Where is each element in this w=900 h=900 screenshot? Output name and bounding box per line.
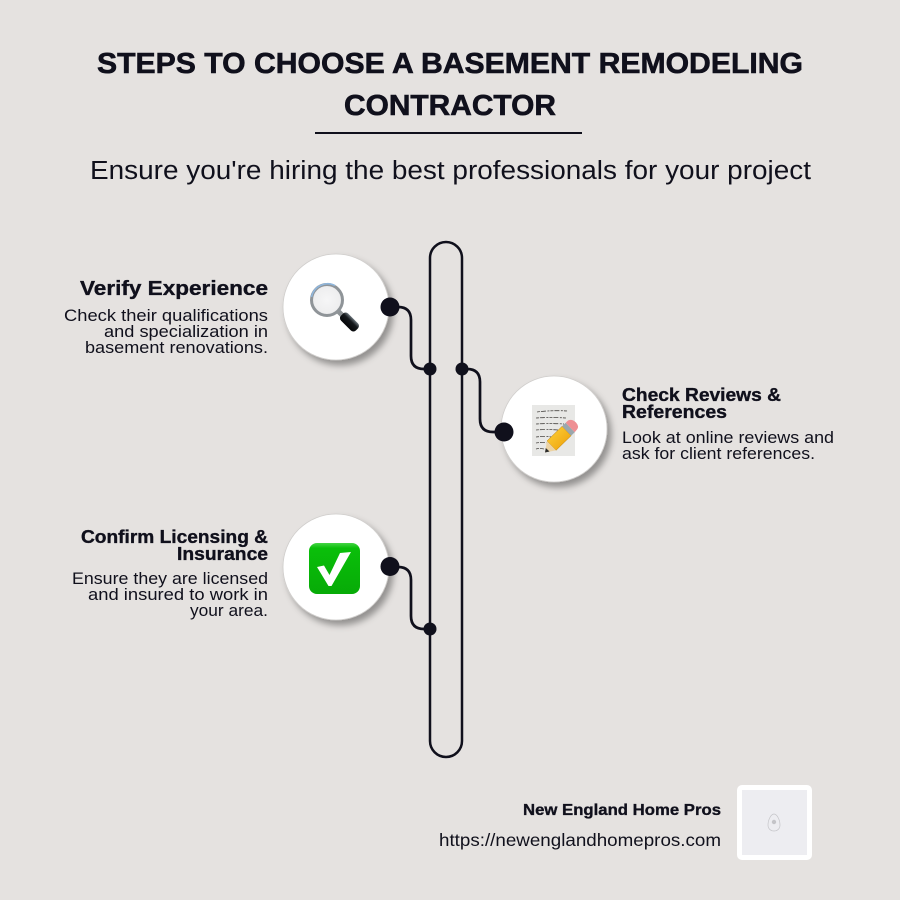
title: STEPS TO CHOOSE A BASEMENT REMODELING [97, 48, 803, 80]
connector 2 [456, 362, 514, 442]
step 1 text: and specialization in [104, 323, 268, 341]
title: CONTRACTOR [344, 90, 556, 122]
connector 1 [380, 298, 436, 376]
step 3 text: and insured to work in [88, 586, 268, 604]
subtitle: Ensure you're hiring the best professionals for your project [90, 157, 811, 185]
step 1 text: Verify Experience [80, 278, 268, 300]
connector 3 [380, 557, 436, 636]
timeline track [430, 242, 462, 757]
step 2 circle [501, 376, 607, 482]
icon: magnifying glass [312, 284, 360, 333]
step 3: confirm licensing [72, 514, 436, 636]
step 3 text: Ensure they are licensed [72, 570, 268, 588]
step 3 text: Confirm Licensing & [81, 527, 268, 547]
step 3 circle [283, 514, 389, 620]
step 1: verify experience [64, 254, 436, 376]
footer url: https://newenglandhomepros.com [439, 830, 721, 850]
footer logo [737, 785, 812, 860]
step 1 text: basement renovations. [85, 339, 268, 357]
icon: memo and pencil [532, 405, 578, 456]
step 1 text: Check their qualifications [64, 307, 268, 325]
footer company name: New England Home Pros [523, 802, 721, 819]
step 2: check reviews [456, 362, 834, 482]
step 3 text [72, 527, 268, 620]
step 1 text [64, 278, 268, 357]
step 1 circle [283, 254, 389, 360]
step 2 text: References [622, 402, 727, 422]
icon: green check mark [309, 543, 360, 594]
title [97, 48, 803, 122]
step 2 text: Check Reviews & [622, 385, 781, 405]
step 3 text: your area. [190, 602, 268, 620]
step 2 text [622, 385, 834, 463]
step 2 text: ask for client references. [622, 445, 815, 463]
step 3 text: Insurance [177, 544, 268, 564]
step 2 text: Look at online reviews and [622, 429, 834, 447]
